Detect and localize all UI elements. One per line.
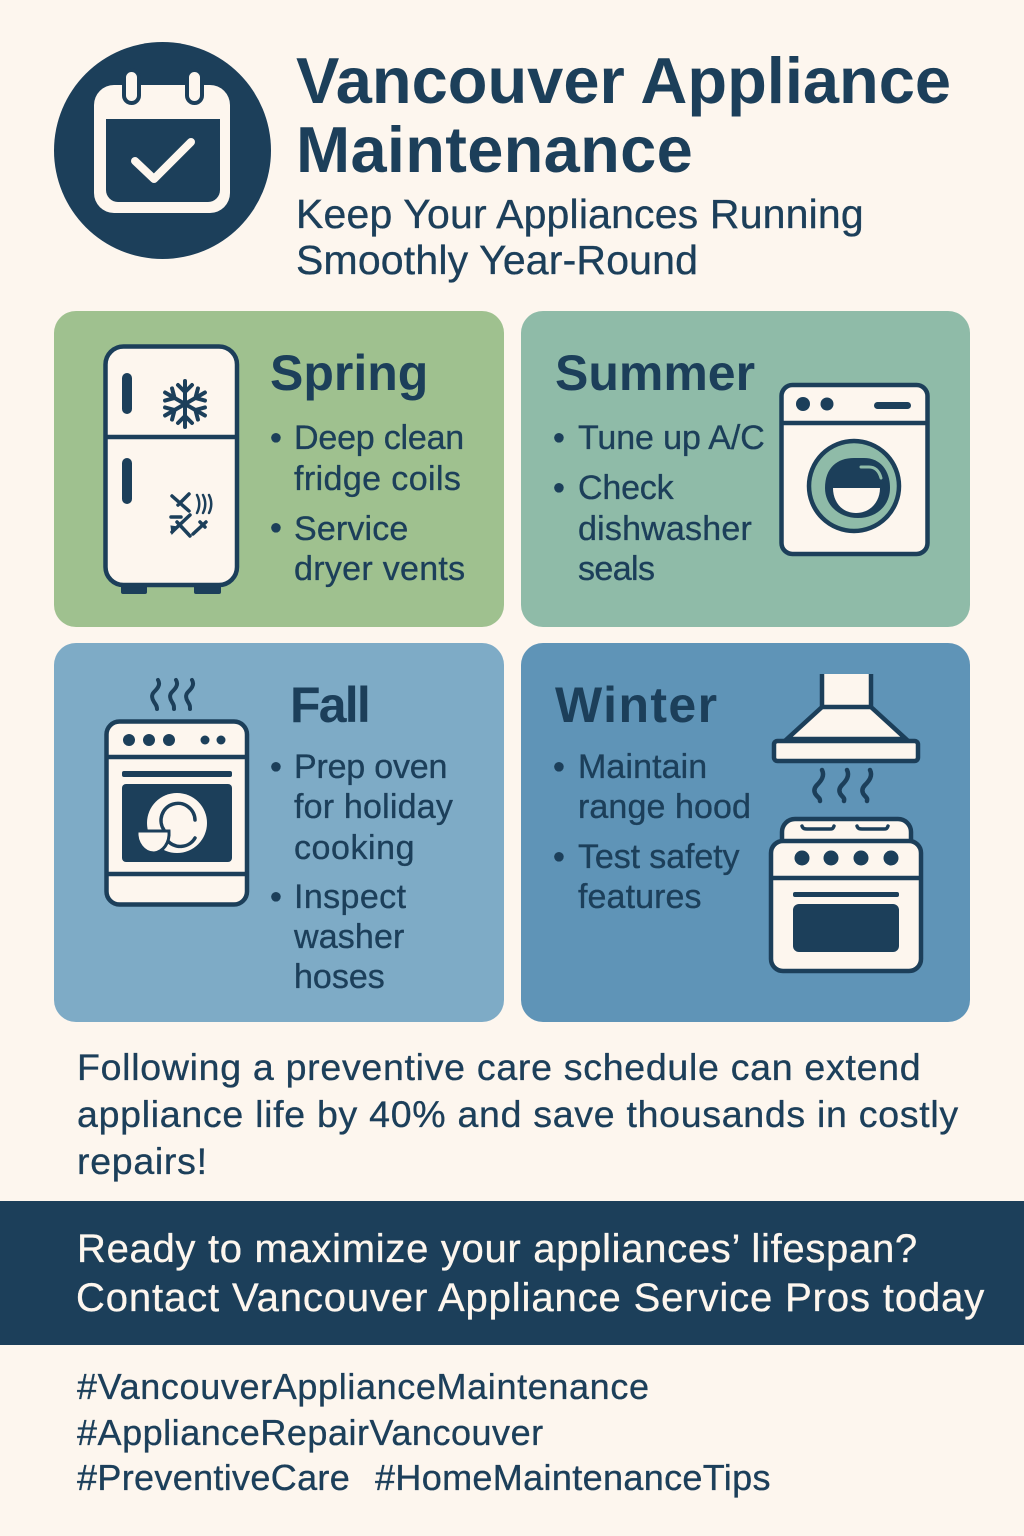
list: summer tasks: seals [578,550,654,588]
list: winter tasks: • [553,838,565,876]
list: spring tasks: dryer vents [294,550,465,588]
list: fall tasks: for holiday [294,788,453,826]
list: summer tasks [553,419,765,588]
title: Vancouver Appliance [296,44,951,117]
subtitle: Smoothly Year-Round [296,236,698,282]
list: winter tasks: Test safety [578,838,739,876]
list: summer tasks: • [553,419,565,457]
subtitle: Keep Your Appliances Running [296,191,864,237]
panel: winter [521,643,970,1022]
icon: washing machine [779,382,930,556]
panel: fall [54,643,504,1022]
list: summer tasks: dishwasher [578,510,752,548]
list: fall tasks: cooking [294,829,415,867]
list: summer tasks: Check [578,469,673,507]
list: winter tasks [553,748,751,916]
list: summer tasks: • [553,469,565,507]
list: fall tasks: Inspect [294,878,406,916]
list: winter tasks: range hood [578,788,751,826]
text block: preventive care statement: appliance life by 40% and save thousands in costly [77,1093,959,1135]
heading: fall: Fall [290,677,369,733]
hashtags: #PreventiveCare [77,1457,350,1498]
list: fall tasks: • [270,748,282,786]
list: summer tasks: Tune up A/C [578,419,765,457]
hashtags: #ApplianceRepairVancouver [77,1412,544,1452]
text block: preventive care statement: repairs! [77,1140,208,1182]
heading: spring: Spring [270,345,428,401]
list: spring tasks: fridge coils [294,460,461,498]
hashtags: #VancouverApplianceMaintenance [77,1366,650,1407]
hashtags [76,1366,771,1498]
heading: summer: Summer [555,345,755,401]
icon: range hood and stove [768,674,924,974]
list: fall tasks: hoses [294,958,385,996]
list: spring tasks: • [270,509,282,547]
call to action text: Contact Vancouver Appliance Service Pros today [76,1276,985,1320]
hashtags: #HomeMaintenanceTips [375,1457,771,1498]
list: fall tasks: washer [294,918,405,956]
title: Maintenance [296,113,693,186]
list: fall tasks [270,748,453,996]
call to action text: Ready to maximize your appliances’ lifespan? [77,1227,918,1271]
heading: winter: Winter [555,677,719,733]
panel: spring [54,311,504,627]
list: winter tasks: Maintain [578,748,707,786]
list: fall tasks: Prep oven [294,748,447,786]
call to action banner [0,1201,1024,1345]
title [296,44,951,186]
text block: preventive care statement [77,1046,959,1182]
panel: summer [521,311,970,627]
text block: preventive care statement: Following a preventive care schedule can extend [77,1046,921,1088]
list: spring tasks: Deep clean [294,419,464,457]
list: winter tasks: • [553,748,565,786]
subtitle [296,191,864,283]
list: spring tasks: • [270,419,282,457]
icon: oven [104,678,250,907]
list: spring tasks [270,419,465,588]
header icon: calendar with check [54,42,271,259]
icon: refrigerator [103,344,240,594]
list: spring tasks: Service [294,510,408,548]
list: winter tasks: features [578,878,702,916]
list: fall tasks: • [270,878,282,916]
call to action text [76,1227,985,1320]
